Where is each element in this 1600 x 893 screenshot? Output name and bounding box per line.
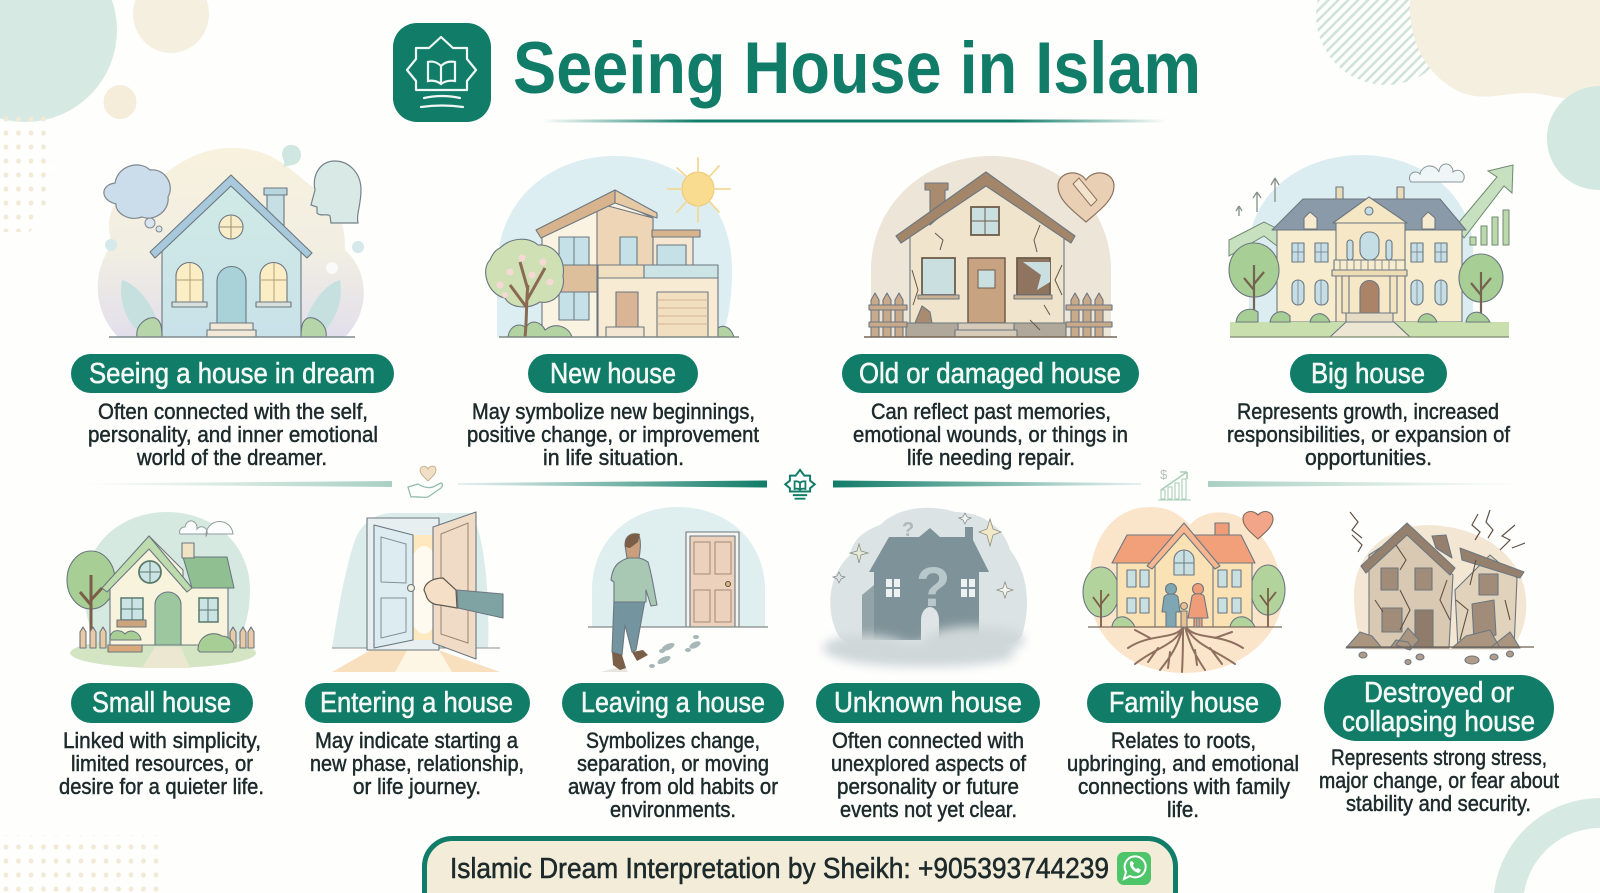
panel: leaving a house bbox=[562, 507, 784, 822]
illustration: man walking away from door bbox=[588, 507, 768, 672]
pill: destroyed or collapsing house: Destroyed or bbox=[1364, 677, 1514, 709]
description: Represents strong stress, bbox=[1331, 745, 1547, 770]
panel: new house bbox=[467, 156, 760, 470]
description: environments. bbox=[610, 797, 736, 822]
description: unexplored aspects of bbox=[831, 751, 1027, 776]
footer contact bar: Islamic Dream Interpretation by Sheikh: +905393744239 bbox=[450, 853, 1109, 885]
pill: small house bbox=[71, 683, 253, 723]
description: away from old habits or bbox=[568, 774, 778, 799]
description: stability and security. bbox=[1346, 791, 1531, 816]
pill: big house bbox=[1290, 354, 1447, 393]
description: responsibilities, or expansion of bbox=[1227, 422, 1511, 447]
pill: family house: Family house bbox=[1109, 687, 1259, 719]
pill: new house: New house bbox=[550, 358, 676, 390]
panel: destroyed or collapsing house bbox=[1319, 510, 1560, 816]
description: new phase, relationship, bbox=[310, 751, 524, 776]
icon: whatsapp bbox=[1117, 852, 1151, 885]
description: life needing repair. bbox=[907, 445, 1075, 470]
description: events not yet clear. bbox=[840, 797, 1017, 822]
pill: family house bbox=[1087, 683, 1281, 723]
illustration: foggy house with question marks: ? bbox=[902, 519, 914, 541]
description bbox=[1227, 399, 1511, 470]
description: Represents growth, increased bbox=[1237, 399, 1499, 424]
pill: seeing a house in dream: Seeing a house in dream bbox=[89, 358, 375, 390]
icon: hand holding heart bbox=[408, 466, 442, 497]
panel: family house bbox=[1067, 507, 1299, 822]
description: separation, or moving bbox=[577, 751, 769, 776]
footer contact bar bbox=[424, 838, 1176, 893]
icon: centre star and book bbox=[785, 470, 815, 499]
description: limited resources, or bbox=[71, 751, 253, 776]
illustration: foggy house with question marks bbox=[823, 508, 1027, 667]
description: world of the dreamer. bbox=[136, 445, 327, 470]
description: connections with family bbox=[1078, 774, 1291, 799]
description bbox=[1319, 745, 1560, 816]
title underline bbox=[541, 120, 1167, 122]
description: emotional wounds, or things in bbox=[853, 422, 1128, 447]
description: major change, or fear about bbox=[1319, 768, 1560, 793]
description: desire for a quieter life. bbox=[59, 774, 264, 799]
illustration: modern house, tree and sun bbox=[486, 156, 739, 337]
description bbox=[88, 399, 378, 470]
pill: new house bbox=[528, 354, 698, 393]
description: May symbolize new beginnings, bbox=[472, 399, 755, 424]
pill: leaving a house: Leaving a house bbox=[581, 687, 765, 719]
pill: old or damaged house: Old or damaged house bbox=[859, 358, 1121, 390]
description: Can reflect past memories, bbox=[871, 399, 1111, 424]
description bbox=[59, 728, 264, 799]
pill: big house: Big house bbox=[1311, 358, 1425, 390]
panel: big house bbox=[1227, 155, 1513, 470]
description: life. bbox=[1167, 797, 1199, 822]
icon: growth chart: $ bbox=[1160, 467, 1168, 482]
panel: old or damaged house bbox=[842, 156, 1139, 470]
description: opportunities. bbox=[1305, 445, 1432, 470]
pill: unknown house: Unknown house bbox=[834, 687, 1022, 719]
pill: small house: Small house bbox=[92, 687, 231, 719]
description: Often connected with the self, bbox=[98, 399, 368, 424]
description: Often connected with bbox=[832, 728, 1024, 753]
pill: destroyed or collapsing house: collapsing house bbox=[1342, 706, 1535, 738]
pill: destroyed or collapsing house bbox=[1324, 675, 1554, 741]
panel: seeing a house in dream bbox=[71, 145, 394, 470]
illustration: cracked old house bbox=[864, 156, 1117, 337]
header icon: star and open book bbox=[393, 23, 491, 122]
section divider with icons bbox=[82, 466, 1522, 500]
description: personality or future bbox=[837, 774, 1019, 799]
illustration: opening door with hand bbox=[332, 512, 503, 672]
illustration: cottage bbox=[67, 512, 256, 668]
title: Seeing House in Islam bbox=[513, 28, 1201, 109]
illustration: mansion with growth arrows bbox=[1229, 155, 1513, 337]
panel: unknown house bbox=[816, 508, 1040, 822]
description: upbringing, and emotional bbox=[1067, 751, 1299, 776]
description bbox=[831, 728, 1027, 822]
panel: entering a house bbox=[305, 512, 530, 799]
description: or life journey. bbox=[353, 774, 481, 799]
description: Symbolizes change, bbox=[586, 728, 760, 753]
description bbox=[568, 728, 778, 822]
description: in life situation. bbox=[543, 445, 684, 470]
description: personality, and inner emotional bbox=[88, 422, 378, 447]
description: Relates to roots, bbox=[1111, 728, 1256, 753]
description bbox=[1067, 728, 1299, 822]
description bbox=[853, 399, 1128, 470]
panel: small house bbox=[59, 512, 264, 799]
description: positive change, or improvement bbox=[467, 422, 760, 447]
illustration: foggy house with question marks: ? bbox=[916, 555, 950, 618]
illustration: family, house and roots bbox=[1083, 507, 1285, 673]
pill: entering a house: Entering a house bbox=[320, 687, 513, 719]
illustration: collapsing house bbox=[1346, 510, 1534, 664]
icon: growth chart bbox=[1158, 467, 1191, 500]
description bbox=[310, 728, 524, 799]
description: Linked with simplicity, bbox=[63, 728, 261, 753]
illustration: dreaming house bbox=[98, 145, 364, 337]
description: May indicate starting a bbox=[315, 728, 518, 753]
description bbox=[467, 399, 760, 470]
